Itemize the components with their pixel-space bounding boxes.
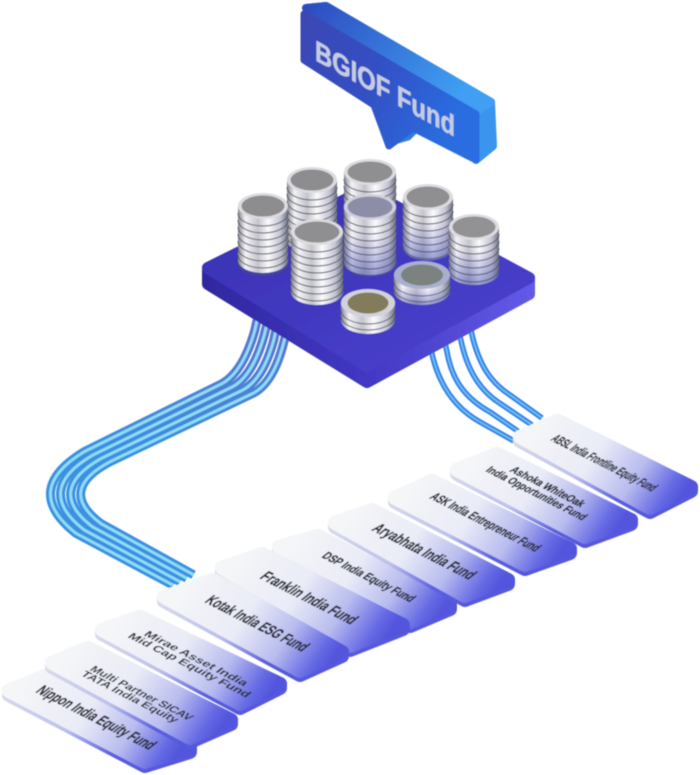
coin stack 2 xyxy=(287,167,337,253)
card: Mirae Asset India Mid Cap Equity Fund: Mid Cap Equity Fund xyxy=(125,631,253,700)
speech bubble: BGIOF Fund xyxy=(304,6,493,160)
right wire bundle xyxy=(430,326,542,441)
card: Aryabhata India Fund: Aryabhata India Fund xyxy=(368,521,481,582)
card: Mirae Asset India Mid Cap Equity Fund xyxy=(102,617,280,708)
card: Multi Partner SICAV TATA India Equity: Multi Partner SICAV xyxy=(87,664,196,723)
platform xyxy=(208,190,529,382)
card: Franklin India Fund: Franklin India Fund xyxy=(256,569,362,627)
coin stack 7 xyxy=(291,219,343,305)
card: Ashoka WhiteOak India Opportunities Fund: India Opportunities Fund xyxy=(483,464,591,522)
card: ABSL India Frontline Equity Fund xyxy=(520,421,691,512)
coin stack 3 xyxy=(344,159,396,235)
card: Multi Partner SICAV TATA India Equity xyxy=(52,648,231,742)
coin stacks xyxy=(238,159,499,334)
card: Multi Partner SICAV TATA India Equity: TATA India Equity xyxy=(78,669,182,725)
card: Kotak India ESG Fund xyxy=(164,580,342,675)
coin stack 9 xyxy=(341,289,395,334)
card: DSP India Equity Fund xyxy=(279,536,450,626)
bubble label: BGIOF Fund xyxy=(315,34,455,144)
card: Mirae Asset India Mid Cap Equity Fund: Mirae Asset India xyxy=(141,629,252,689)
left wire bundle xyxy=(50,316,287,585)
coin stack 4 xyxy=(344,194,396,276)
card: Ashoka WhiteOak India Opportunities Fund: Ashoka WhiteOak xyxy=(507,464,589,509)
coin stack 8 xyxy=(394,261,450,305)
card: Kotak India ESG Fund: Kotak India ESG Fund xyxy=(201,593,314,654)
card: Aryabhata India Fund xyxy=(335,510,508,600)
card: DSP India Equity Fund: DSP India Equity Fund xyxy=(319,550,420,604)
card: ASK India Entrepreneur Fund: ASK India Entrepreneur Fund xyxy=(427,490,545,554)
coin stack 5 xyxy=(403,184,453,260)
fund cards xyxy=(9,421,691,766)
coin stack 6 xyxy=(449,214,499,285)
card: Franklin India Fund xyxy=(222,554,403,650)
coin stack 1 xyxy=(238,193,288,275)
card: Ashoka WhiteOak India Opportunities Fund xyxy=(457,454,631,541)
card: ASK India Entrepreneur Fund xyxy=(395,481,570,569)
card: Nippon India Equity Fund xyxy=(9,675,190,766)
